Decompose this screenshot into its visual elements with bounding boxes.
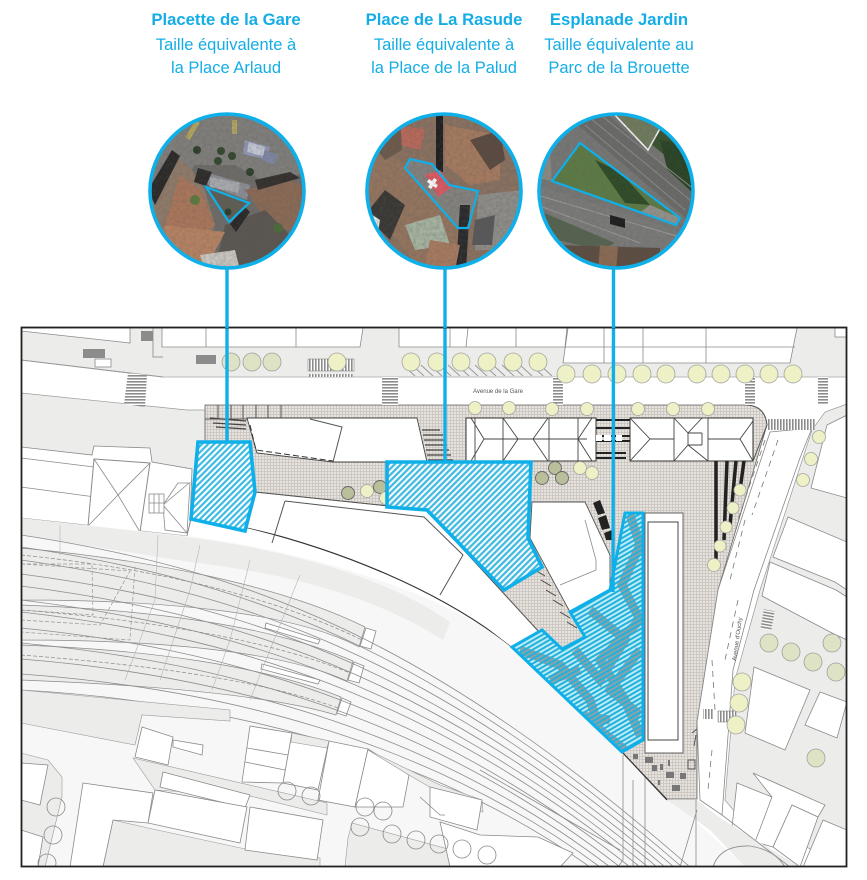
- map: central building: [530, 500, 615, 612]
- map: plaza paving: [205, 405, 767, 799]
- highlighted outline: Place Arlaud: [206, 187, 249, 222]
- connector line: Esplanade Jardin: [611, 326, 615, 592]
- heading: Place de La Rasude: Place de La Rasude: [366, 10, 522, 29]
- heading: Esplanade Jardin: [544, 10, 694, 77]
- map: eastern black stairs: [716, 461, 744, 560]
- heading: Placette de la Gare: la Place Arlaud: [171, 59, 281, 77]
- map: main railway edge: [245, 527, 667, 800]
- map: station forecourt: [21, 393, 205, 536]
- map: upper street band and blocks: [21, 328, 847, 377]
- heading: Esplanade Jardin: Parc de la Brouette: [548, 59, 690, 77]
- connector line: Placette de la Gare: [225, 326, 229, 442]
- zone: Place de La Rasude hatch: [387, 462, 542, 590]
- map: railway tracks and platforms: [21, 518, 745, 867]
- trees: upper rows: [222, 353, 802, 416]
- heading: Place de La Rasude: Taille équivalente à: [374, 36, 515, 54]
- map: east side streets and buildings: [667, 404, 847, 867]
- aerial photo: Place Arlaud: [148, 112, 306, 270]
- map: crosswalks: [124, 373, 828, 407]
- trees: east side: [727, 430, 845, 767]
- connector stem above map: Esplanade Jardin: [612, 268, 615, 328]
- map: white building south of plaza: [245, 492, 540, 647]
- street label: Avenue d'Ouchy: Avenue d'Ouchy: [732, 617, 744, 661]
- heading: Place de La Rasude: la Place de la Palud: [371, 59, 517, 77]
- zone: Esplanade Jardin hatch: [512, 513, 643, 752]
- map: steps and stairs near building: [535, 570, 577, 628]
- map: long building: [645, 513, 683, 753]
- heading: Placette de la Gare: Placette de la Gare: [151, 10, 301, 29]
- connector stem above map: Placette de la Gare: [225, 268, 229, 328]
- heading: Esplanade Jardin: Taille équivalente au: [544, 36, 694, 54]
- heading: Place de La Rasude: [366, 10, 522, 77]
- map: roofed row buildings: [466, 405, 767, 461]
- heading: Placette de la Gare: Taille équivalente à: [156, 36, 297, 54]
- connector stem above map: Place de La Rasude: [443, 268, 447, 328]
- highlighted outline: Parc de la Brouette: [552, 143, 680, 225]
- connector line: Place de La Rasude: [443, 326, 447, 462]
- street label: Avenue de la Gare: Avenue de la Gare: [473, 389, 524, 395]
- zone: Placette de la Gare hatch: [191, 442, 255, 531]
- site plan map: [21, 326, 847, 872]
- trees: plaza clusters: [342, 462, 746, 572]
- map: bicycle parking and small furniture: [633, 754, 686, 791]
- highlighted outline: Place de la Palud: [405, 159, 478, 228]
- aerial photo: Place de la Palud: [365, 112, 523, 270]
- trees: southern outlines: [38, 782, 496, 872]
- heading: Esplanade Jardin: Esplanade Jardin: [550, 10, 688, 29]
- aerial photo: Parc de la Brouette: [530, 112, 695, 270]
- map frame: [22, 328, 846, 866]
- heading: Placette de la Gare: [151, 10, 301, 77]
- map: southern buildings: [21, 690, 620, 867]
- map: office building: [247, 418, 427, 462]
